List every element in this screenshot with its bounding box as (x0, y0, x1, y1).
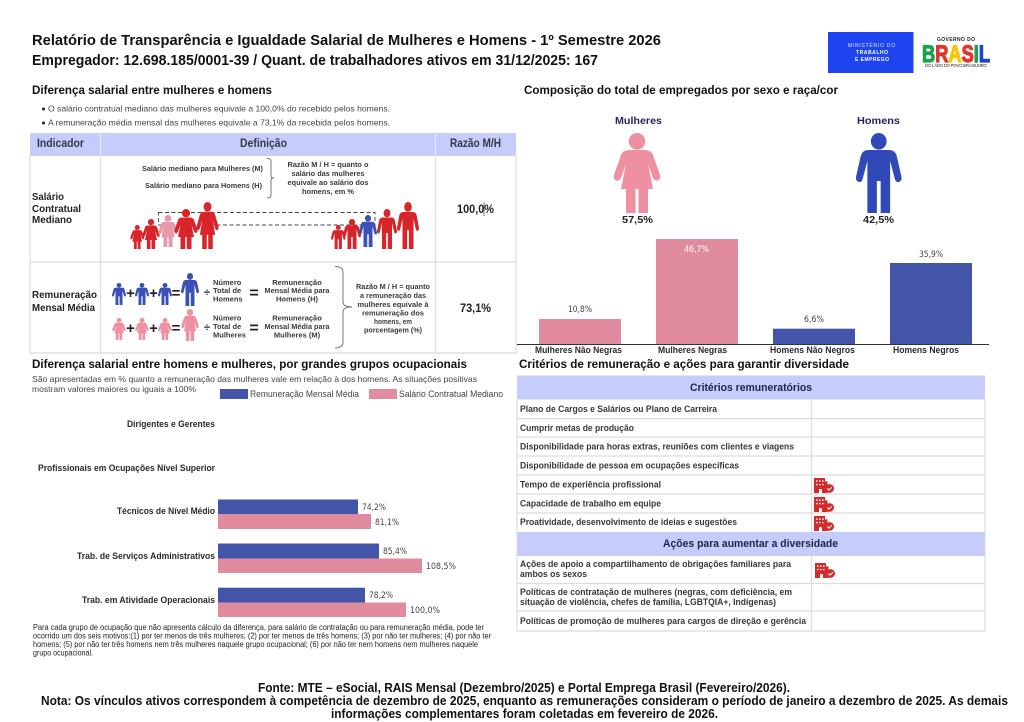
row: remuneração mensal média: Mulheres (M) (274, 330, 321, 340)
row: remuneração mensal média: Mulheres (213, 330, 246, 340)
heading: composição: Composição do total de empregados por sexo e raça/cor (524, 83, 838, 97)
heading: grandes grupos ocupacionais: Diferença salarial entre homens e mulheres, por grandes grupos ocupacionais (32, 357, 467, 371)
column chart: sexo e raça/cor: 10,8% (568, 305, 592, 315)
note: motivos (33, 623, 491, 658)
panel: tabela de indicadores (30, 133, 516, 353)
row: remuneração mensal média: Remuneração (272, 278, 322, 287)
row: salário contratual mediano: 100,0% (457, 202, 494, 216)
row: salário contratual mediano: Contratual (32, 203, 81, 215)
bar chart: grupos ocupacionais: 74,2% (362, 503, 386, 513)
subtitle text: mostram valores maiores ou iguais a 100% (32, 384, 196, 394)
row: remuneração mensal média: remuneração dos (362, 308, 424, 318)
heading: critérios: Critérios de remuneração e ações para garantir diversidade (519, 357, 849, 371)
row: remuneração mensal média: Homens (H) (276, 294, 319, 304)
column chart: sexo e raça/cor: Mulheres Não Negras (535, 345, 622, 355)
row: remuneração mensal média: homens, em (374, 317, 412, 326)
table header: Indicador (37, 138, 84, 150)
row: remuneração mensal média: Número (213, 278, 242, 287)
table header: Definição (240, 138, 287, 150)
row: remuneração mensal média: + (149, 285, 158, 302)
note: motivos: Para cada grupo de ocupação que não apresenta cálculo da diferença, para salário de contratação ou para remuneração média, pode ter (33, 623, 484, 632)
title (32, 33, 661, 69)
row: remuneração mensal média: Remuneração (272, 314, 322, 322)
table header (30, 133, 516, 156)
bar chart: grupos ocupacionais: 85,4% (383, 547, 407, 557)
icon: equação homens (112, 273, 199, 306)
bar chart: grupos ocupacionais (38, 419, 456, 617)
section: ações para diversidade: Ações para aumentar a diversidade (663, 538, 838, 550)
panel: critérios e ações: ambos os sexos (520, 569, 587, 579)
legend: Salário Contratual Mediano (399, 389, 503, 399)
icon: equação mulheres (112, 309, 199, 341)
row: remuneração mensal média: Mensal Média (32, 302, 95, 314)
icon: empresa confirmada (capacidade) (814, 497, 834, 512)
row: salário contratual mediano: Mediano (32, 214, 72, 226)
row: remuneração mensal média: Número (213, 314, 242, 322)
logo: Governo do Brasil: DO LADO DO POVO BRASILEIRO (925, 63, 987, 68)
note: motivos: ocorrido um dos seis motivos:(1) por ter menos de três mulheres; (2) por ter menos de três homens; (3) por não ter mulheres; (4) por não ter (33, 632, 491, 640)
logo: Ministério do Trabalho e Emprego: E EMPREGO (855, 57, 889, 63)
row: remuneração mensal média: Mensal Média para (264, 286, 330, 295)
icon: família feminina (130, 202, 219, 249)
bullet list: O salário contratual mediano das mulheres equivale a 100,0% do recebido pelos homens. (48, 104, 390, 114)
row: salário contratual mediano: Salário mediano para Mulheres (M) (142, 164, 263, 173)
bar chart: grupos ocupacionais: Trab. em Atividade Operacionais (82, 595, 215, 605)
row: remuneração mensal média: Homens (213, 294, 243, 304)
icon: homens 42,5% (856, 115, 902, 226)
logo: Ministério do Trabalho e Emprego: TRABALHO (856, 50, 888, 56)
row: salário contratual mediano: Razão M / H = quanto o (288, 160, 369, 169)
row: remuneração mensal média: + (126, 320, 135, 337)
footer: fonte e nota (41, 681, 1008, 721)
note: motivos: grupo ocupacional. (33, 648, 93, 658)
row: remuneração mensal média: a remuneração das (360, 291, 426, 300)
bar chart: grupos ocupacionais: 108,5% (426, 562, 456, 572)
bar chart: grupos ocupacionais: Profissionais em Ocupações Nível Superior (38, 463, 215, 473)
row: remuneração mensal média: Mensal Média para (264, 322, 330, 331)
logo: Ministério do Trabalho e Emprego: MINISTÉRIO DO (848, 42, 895, 49)
panel: critérios e ações: Disponibilidade de pessoa em ocupações específicas (520, 460, 739, 470)
panel: critérios e ações: Disponibilidade para horas extras, reuniões com clientes e viagens (520, 442, 794, 452)
bar chart: grupos ocupacionais: 100,0% (410, 606, 440, 616)
icon: mulheres 57,5% (614, 115, 662, 226)
icon: mulheres 57,5%: 57,5% (622, 214, 654, 226)
row: remuneração mensal média (32, 266, 491, 348)
panel: critérios e ações: situação de violência, chefes de família, LGBTQIA+, Indígenas) (520, 597, 776, 607)
column chart: sexo e raça/cor: 35,9% (919, 250, 943, 260)
row: remuneração mensal média: + (149, 320, 158, 337)
icon: homens 42,5%: 42,5% (863, 214, 895, 226)
panel: critérios e ações: Plano de Cargos e Salários ou Plano de Carreira (520, 404, 718, 414)
row: remuneração mensal média: = (249, 320, 259, 337)
bar chart: grupos ocupacionais: Técnicos de Nível Médio (117, 506, 215, 516)
logo: Ministério do Trabalho e Emprego (828, 32, 914, 73)
bullet list (42, 104, 390, 128)
row: remuneração mensal média: + (126, 285, 135, 302)
row: remuneração mensal média: ÷ (204, 322, 210, 334)
column chart: sexo e raça/cor: 6,6% (804, 315, 824, 325)
row: salário contratual mediano: Salário (32, 191, 64, 203)
bar chart: grupos ocupacionais: Trab. de Serviços Administrativos (77, 551, 215, 561)
subtitle text: São apresentadas em % quanto a remuneração das mulheres vale em relação à dos homens. As situações positivas (32, 374, 477, 384)
panel: critérios e ações: Cumprir metas de produção (520, 423, 634, 433)
column chart: sexo e raça/cor: 46,7% (684, 245, 709, 255)
row: remuneração mensal média: porcentagem (%) (364, 326, 422, 334)
logo: Governo do Brasil: GOVERNO DO (937, 37, 975, 43)
legend: Remuneração Mensal Média (250, 389, 359, 399)
panel: critérios e ações: Políticas de promoção de mulheres para cargos de direção e gerência (520, 616, 807, 626)
heading: diferença salarial: Diferença salarial entre mulheres e homens (32, 83, 272, 97)
footer: fonte e nota: Fonte: MTE – eSocial, RAIS Mensal (Dezembro/2025) e Portal Emprega Brasil (Fevereiro/2026). (258, 681, 790, 695)
column chart: sexo e raça/cor (517, 239, 989, 355)
bar chart: grupos ocupacionais: Dirigentes e Gerentes (127, 419, 215, 429)
row: salário contratual mediano: salário das mulheres (292, 169, 364, 178)
panel: critérios e ações: Proatividade, desenvolvimento de ideias e sugestões (520, 517, 737, 527)
icon: mulheres 57,5%: Mulheres (615, 115, 662, 127)
icon: empresa confirmada (tempo de experiência) (814, 478, 834, 493)
icon: homens 42,5%: Homens (857, 115, 900, 127)
row: remuneração mensal média: Total de (213, 322, 241, 331)
row: remuneração mensal média: 73,1% (460, 301, 491, 315)
column chart: sexo e raça/cor: Homens Não Negros (770, 345, 855, 355)
row: salário contratual mediano (32, 158, 494, 249)
footer: fonte e nota: informações complementares foram coletadas em fevereiro de 2026. (331, 707, 718, 721)
title: Empregador: 12.698.185/0001-39 / Quant. de trabalhadores ativos em 31/12/2025: 167 (32, 53, 598, 69)
row: remuneração mensal média: Total de (213, 286, 241, 295)
row: salário contratual mediano: equivale ao salário dos (288, 178, 368, 187)
logo: Governo do Brasil: BRASIL (922, 41, 990, 68)
section: critérios remuneratórios: Critérios remuneratórios (690, 382, 812, 394)
column chart: sexo e raça/cor: Mulheres Negras (658, 345, 727, 355)
column chart: sexo e raça/cor: Homens Negros (893, 345, 959, 355)
legend (220, 389, 503, 399)
bar chart: grupos ocupacionais: 81,1% (375, 518, 399, 528)
bullet list: A remuneração média mensal das mulheres equivale a 73,1% da recebida pelos homens. (48, 118, 390, 128)
panel: critérios e ações (517, 376, 985, 631)
panel: critérios e ações: Tempo de experiência profissional (520, 480, 661, 490)
icon: empresa confirmada (proatividade) (814, 516, 834, 531)
row: salário contratual mediano: Salário mediano para Homens (H) (145, 181, 262, 190)
panel: critérios e ações: Capacidade de trabalho em equipe (520, 498, 661, 508)
row: remuneração mensal média: ÷ (204, 287, 210, 299)
subtitle text (32, 374, 477, 394)
title: Relatório de Transparência e Igualdade Salarial de Mulheres e Homens - 1º Semestre 2026 (32, 33, 661, 49)
icon: empresa confirmada (ações de apoio) (815, 563, 835, 578)
row: remuneração mensal média: Razão M / H = quanto (356, 282, 430, 291)
row: remuneração mensal média: = (172, 285, 181, 302)
row: remuneração mensal média: mulheres equivale à (358, 300, 429, 309)
row: remuneração mensal média: = (172, 320, 181, 337)
bar chart: grupos ocupacionais: 78,2% (369, 591, 393, 601)
row: salário contratual mediano: homens, em % (302, 187, 354, 196)
panel: critérios e ações: Políticas de contratação de mulheres (negras, com deficiência, em (520, 587, 792, 597)
icon: família masculina (331, 202, 419, 249)
note: motivos: homens; (5) por não ter três homens nem três mulheres naquele grupo ocupacional; (6) por não ter nem homens nem mulheres naquele (33, 640, 478, 649)
row: remuneração mensal média: Remuneração (32, 289, 97, 301)
row: remuneração mensal média: = (249, 285, 259, 302)
table header: Razão M/H (450, 138, 501, 150)
panel: critérios e ações: Ações de apoio a compartilhamento de obrigações familiares para (520, 559, 792, 569)
